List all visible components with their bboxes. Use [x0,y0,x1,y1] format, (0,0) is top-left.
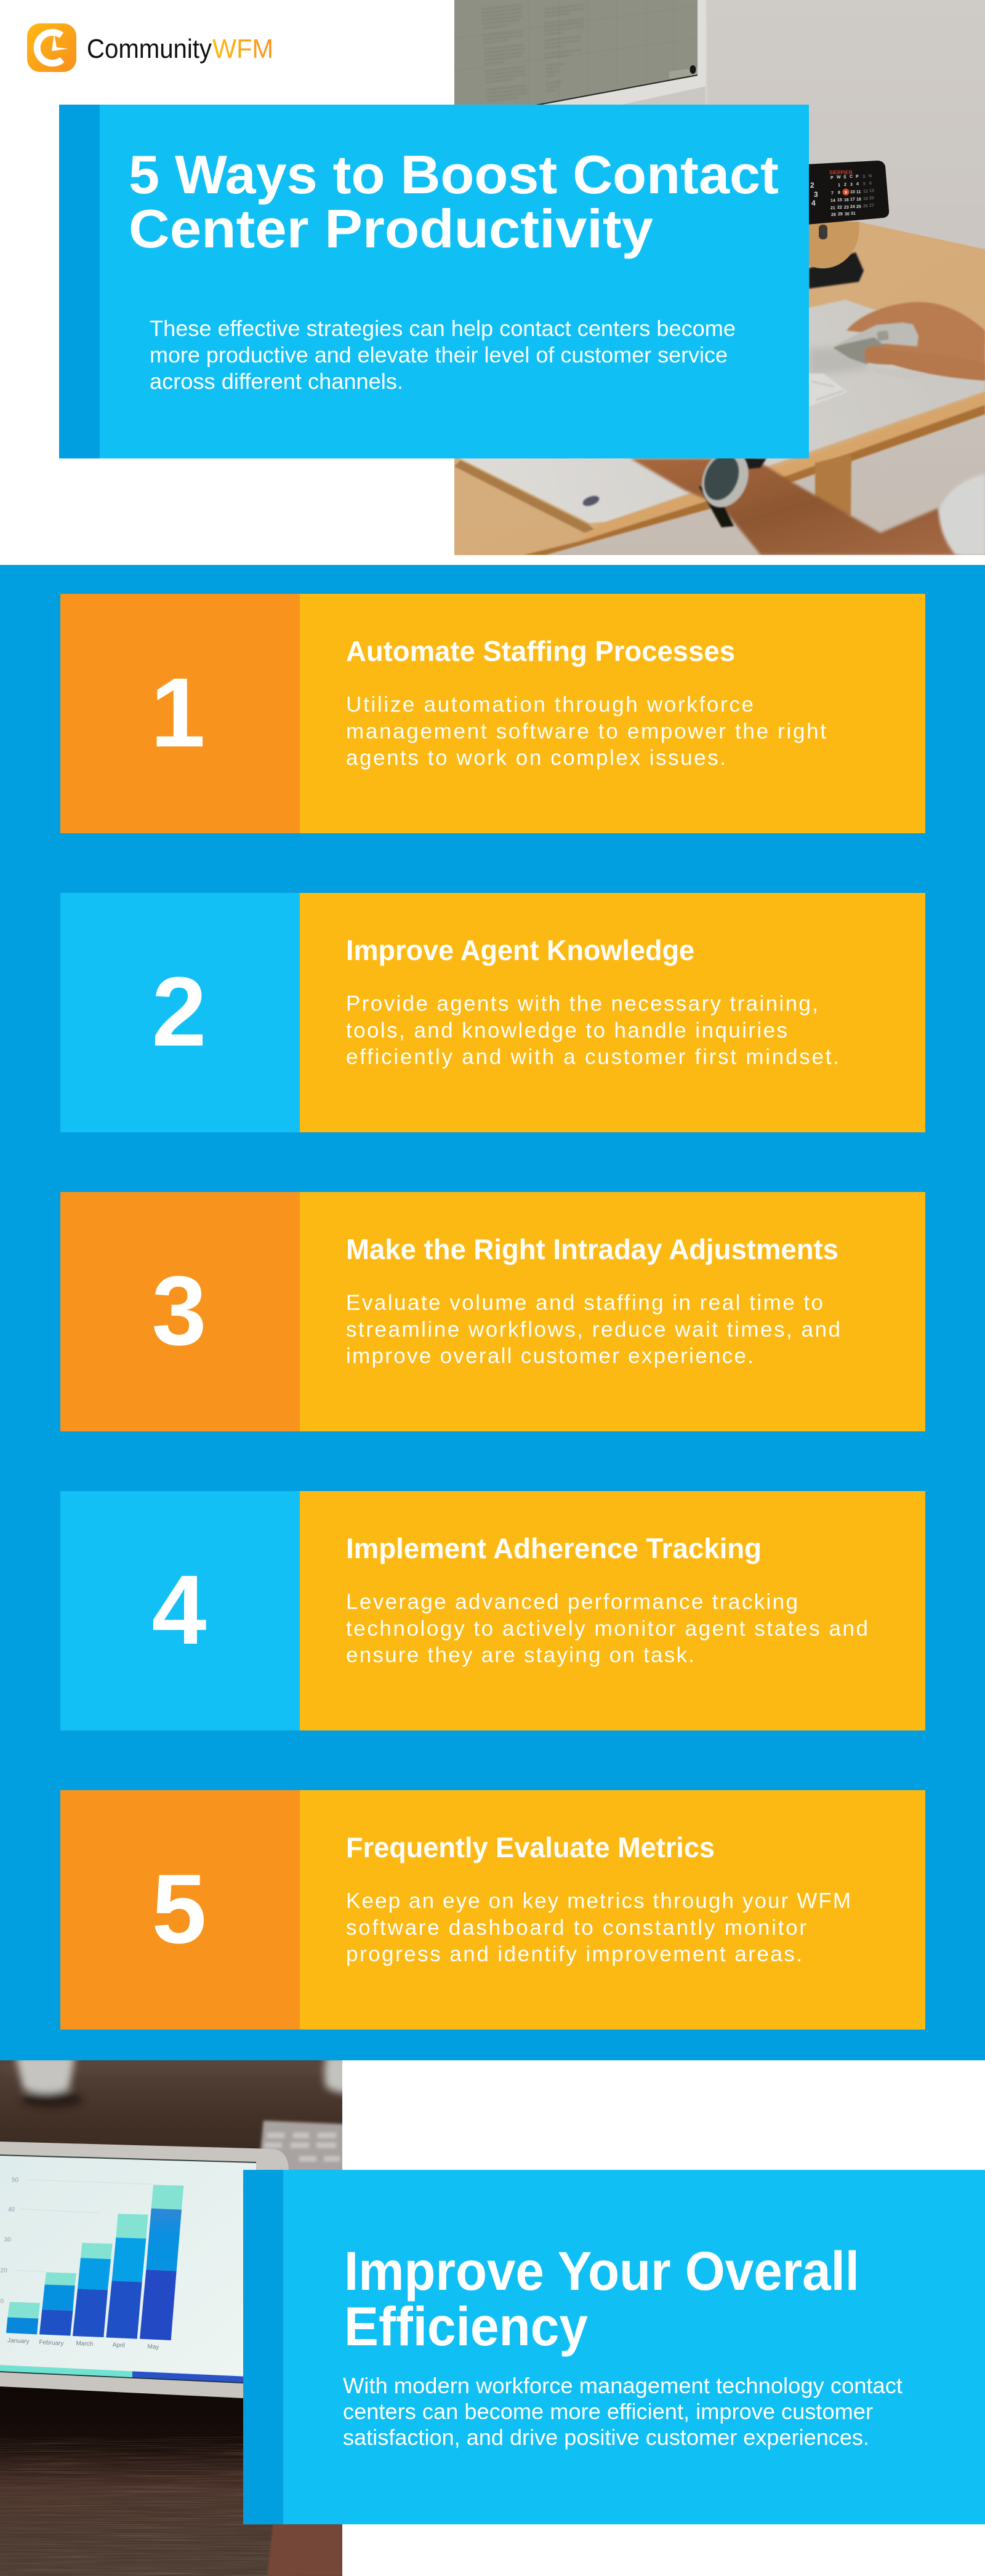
card 2 body: efficiently and with a customer first mindset. [346,1045,839,1069]
phone with calendar [806,161,889,225]
card 5 heading: Frequently Evaluate Metrics [346,1831,715,1863]
card 3 body: improve overall customer experience. [346,1344,754,1368]
intro text: These effective strategies can help contact centers become [150,316,736,341]
phone with calendar: 28 [831,213,836,217]
phone with calendar: P [856,175,859,179]
phone with calendar: 8 [838,191,840,195]
conclusion body [343,2373,903,2450]
card 1 body: Utilize automation through workforce [346,693,754,716]
number 1: 1 [151,657,205,767]
phone with calendar: 17 [850,198,855,202]
logo: CommunityWFM [27,23,273,72]
intro text: across different channels. [150,369,403,394]
card 4 body [346,1590,868,1667]
phone with calendar: S [862,175,866,179]
phone with calendar: 31 [851,212,856,216]
phone with calendar: 11 [856,190,861,194]
logo wordmark: Community [87,34,212,64]
number 2: 2 [152,956,206,1066]
bar chart on tablet: April [113,2342,125,2349]
phone with calendar: 14 [830,199,835,203]
card 2 body: Provide agents with the necessary training, [346,992,818,1015]
phone with calendar: 3 [814,190,818,199]
keyboard corner [806,374,848,407]
bar chart on tablet: 50 [12,2177,19,2183]
desk surface [454,222,985,555]
phone with calendar: 1 [838,183,840,188]
card 3 body: Evaluate volume and staffing in real time to [346,1291,823,1314]
photo: desk with monitor, phone calendar, mouse and hand [454,0,985,555]
conclusion body: centers can become more efficient, improve customer [343,2399,873,2424]
title: Center Productivity [129,198,653,259]
card 3 body: streamline workflows, reduce wait times, and [346,1318,840,1342]
tablet screen [0,2156,256,2377]
phone with calendar: 4 [856,182,859,186]
coffee cups [15,2055,351,2108]
monitor frame [543,0,707,105]
card 5 [60,1790,925,2030]
card 4 body: Leverage advanced performance tracking [346,1590,798,1614]
tablet body [0,2142,289,2398]
bar chart on tablet: March [76,2340,93,2348]
conclusion heading [344,2240,859,2357]
bar chart on tablet: February [39,2339,64,2347]
card 2 body [346,992,839,1069]
bar chart on tablet: May [147,2343,159,2351]
phone with calendar: 27 [869,204,874,208]
card 4 heading: Implement Adherence Tracking [346,1532,762,1564]
card 3 heading: Make the Right Intraday Adjustments [346,1233,838,1265]
felt mouse pad [460,300,985,523]
phone with calendar: W [837,175,841,180]
phone with calendar: 25 [856,205,861,209]
conclusion body: satisfaction, and drive positive customer experiences. [343,2425,869,2450]
title: 5 Ways to Boost Contact [129,144,779,205]
phone with calendar: 15 [837,198,842,202]
forearm [267,2524,342,2576]
phone with calendar: 29 [838,212,843,217]
card 1 [60,594,925,833]
phone with calendar: 2 [810,181,814,190]
card 3 body [346,1291,840,1368]
desk front edge [454,394,985,555]
card 5 body: Keep an eye on key metrics through your WFM [346,1889,851,1913]
shirt sleeve [939,474,985,555]
keyboard [259,2119,342,2170]
conclusion body: With modern workforce management technology contact [343,2373,903,2398]
wood lower area [0,2386,342,2576]
phone with calendar: 16 [844,198,849,202]
phone with calendar: 5 [863,182,866,186]
forearm with watch [630,458,960,555]
phone with calendar: 26 [863,204,868,209]
phone with calendar: P [830,176,834,180]
bar chart on tablet: 40 [8,2207,15,2214]
thumb [864,346,985,380]
number 3: 3 [152,1255,206,1366]
panel: five strategies band [0,565,985,2060]
phone with calendar: 24 [850,205,855,209]
monitor screen [454,0,698,105]
phone with calendar: N [869,174,872,178]
bar chart on tablet [0,2177,243,2383]
phone with calendar: 30 [845,212,850,217]
card 5 body [346,1889,851,1966]
card 2 body: tools, and knowledge to handle inquiries [346,1018,787,1042]
phone stand wood puck [806,222,864,289]
phone with calendar: Ś [843,174,846,180]
phone with calendar: 9 [845,191,847,195]
phone with calendar: 22 [837,206,842,210]
panel: conclusion [243,2170,985,2524]
phone with calendar: 3 [850,183,853,187]
bar chart on tablet: 30 [4,2237,11,2244]
phone with calendar: 7 [831,191,834,196]
phone with calendar: 13 [869,189,874,193]
logo WFM: WFM [212,34,273,64]
conclusion heading: Improve Your Overall [344,2240,859,2302]
card 4 [60,1491,925,1730]
card 1 body [346,693,826,770]
number 5: 5 [152,1854,206,1964]
intro text [150,316,736,394]
card 5 body: software dashboard to constantly monitor [346,1916,806,1940]
mouse [833,321,925,373]
photo: tablet with bar chart on wooden desk [0,2055,351,2576]
bar chart on tablet: January [7,2337,30,2345]
phone with calendar: C [850,175,853,179]
card 1 heading: Automate Staffing Processes [346,635,735,667]
bar chart on tablet: 0 [1,2298,4,2305]
bar chart on tablet: 20 [1,2268,7,2274]
conclusion heading: Efficiency [344,2295,588,2357]
phone with calendar: 2 [844,183,846,187]
card 4 body: ensure they are staying on task. [346,1643,694,1667]
card 3 [60,1192,925,1431]
phone with calendar: 19 [863,197,868,201]
phone with calendar: 6 [869,182,872,186]
phone with calendar: 4 [811,199,816,207]
card 2 heading: Improve Agent Knowledge [346,934,694,966]
desk leg [815,454,851,516]
intro text: more productive and elevate their level of customer service [150,342,728,367]
title [129,144,779,259]
icon: clock C [27,23,76,72]
phone with calendar: 10 [850,190,855,194]
phone with calendar: 12 [863,190,868,194]
card 1 body: management software to empower the right [346,719,826,743]
hand back [846,302,985,380]
card 5 body: progress and identify improvement areas. [346,1942,802,1966]
phone with calendar: 18 [856,198,861,202]
phone with calendar: 21 [830,206,835,210]
card 1 body: agents to work on complex issues. [346,746,726,770]
tablet bottom strip [0,2365,243,2383]
phone with calendar: SIERPIEŃ [829,170,853,175]
phone with calendar: 20 [869,196,874,201]
card 2 [60,893,925,1132]
phone with calendar: 23 [844,206,849,210]
number 4: 4 [152,1554,207,1665]
panel: header [59,105,809,458]
card 4 body: technology to actively monitor agent states and [346,1617,868,1641]
